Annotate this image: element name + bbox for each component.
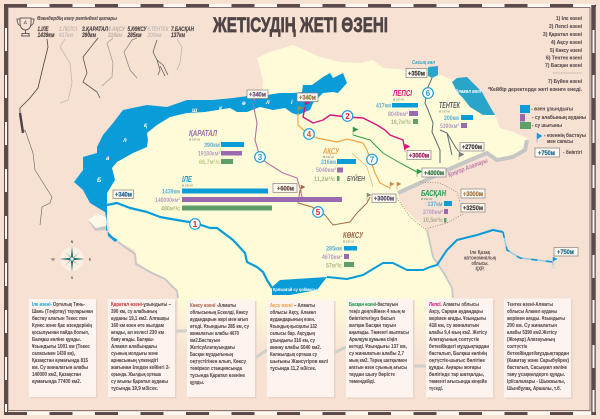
legend: - өзеннің бастауы [544, 132, 586, 139]
card: Ile river: аумағында 77400 км2. [32, 379, 81, 385]
data block: Aksu [314, 146, 356, 183]
card: Koksu river: аудандарын жері мен ағып [190, 317, 248, 323]
lake Balkhash: ө [242, 101, 246, 107]
icon: compass rose: S [71, 276, 74, 280]
data block: Karatal: 19100км² [198, 150, 220, 158]
card: Baskan river: биіктіктегіңуз басып [349, 315, 395, 322]
legend: - су шығыны [532, 123, 562, 129]
river: Karatal [253, 103, 316, 201]
ranking panel: rivers by length: 6.ТЕНТЕК [148, 27, 169, 33]
ranking panel: rivers by length: 390км [82, 33, 96, 39]
label: Xinjiang region [464, 250, 496, 272]
card: Baskan river: жатқан Басқан тауын [348, 323, 396, 329]
data block: Koksu: КӨКСУ [343, 230, 364, 240]
numbered river list [488, 16, 582, 93]
numbered river list: 6) Тентек өзені [546, 56, 582, 62]
card: Koksu river: құяды. [190, 380, 204, 386]
card: Karatal river: суының молдығы және [111, 351, 158, 357]
card: Aksu river: жинау алабы 5040 км2. [269, 344, 321, 351]
data block: Lepsi: 8040км² [388, 111, 408, 118]
card: Karatal river: ауданы 19,1 км2. Алғашқы [111, 316, 169, 322]
card: Lepsi river: 418 км, су жиналатын [429, 323, 479, 329]
data block: Aksu: ӨЗЕНІ [323, 155, 334, 159]
card: Tentek river: облысы Алакөл ауданы [507, 308, 557, 315]
icon: compass rose: E [89, 258, 92, 262]
map: land territory [88, 45, 527, 366]
card: Baskan river: аңалады. Төменгі жылғасы [349, 330, 409, 336]
card: Baskan river: ағатын өзен суының ағысы [349, 365, 407, 371]
elevation labels: +340м [115, 192, 132, 198]
data block: Ile: 1439км [162, 188, 180, 196]
card: Karatal river: тұсында 19,9 м3/сек. [111, 386, 158, 392]
card: Baskan river: Басқан өзені-бастауын [349, 301, 398, 308]
card: Karatal river: арнасының үлкендігі [111, 358, 158, 364]
river number badges [190, 88, 433, 229]
card: Koksu river [187, 300, 256, 398]
elevation labels: +340м [249, 92, 266, 98]
card: Karatal river: Қаратал өзені-ұзындығы – [111, 302, 171, 308]
data block: Tentek: 5390км² [440, 123, 459, 130]
card: Aksu river: аудандарының өзен. [270, 317, 315, 323]
card: Karatal river: баяу ағады. Балқаш- [111, 336, 154, 343]
card: Ile river: км. Су жиналатын алабы [32, 364, 88, 371]
river number badges: 2 [345, 112, 350, 121]
card: Aksu river: Ақсу өзені – Алматы [270, 303, 315, 309]
elevation labels: +3000м [409, 152, 429, 160]
card: Lepsi river: алабы 9,4 мың км2. Жетісу [429, 329, 488, 336]
river number badges: 6 [426, 89, 431, 98]
card: Ile river: Шань (Тәңіртау) тауларынан [32, 309, 93, 315]
icon: trophy [17, 18, 34, 36]
card: Lepsi river: оңтүстік-шығыс бөлігіне [429, 357, 485, 364]
ranking panel: rivers by length [20, 16, 195, 225]
data block: Baskan: 2700км² [423, 209, 443, 216]
ranking panel: rivers by length: 7.БАСҚАН [171, 27, 195, 33]
elevation labels: +2700м [462, 144, 482, 151]
card: Ile river: бастау алатын Текес пен [32, 315, 87, 322]
card: Lepsi river [426, 298, 494, 399]
label: Xinjiang region: автономиялық [464, 256, 496, 262]
title: ЖЕТІСУДІҢ ЖЕТІ ӨЗЕНІ [212, 14, 388, 37]
card: Koksu river: теміржол станциясында [190, 366, 243, 372]
river: Ile [107, 203, 553, 288]
card: Ile river: қосылуынан пайда болып, [32, 329, 89, 336]
data block: Koksu [322, 230, 364, 270]
legend: +750м [538, 150, 555, 157]
card: Tentek river: 200 км. Су жиналатын [507, 323, 557, 329]
ranking panel: rivers by length: 417км [58, 33, 73, 39]
card: Lepsi river: бөлігінде тар шатқалды, [429, 371, 484, 378]
card: Koksu river: Көксу өзені -Алматы [190, 303, 236, 309]
card: Karatal river: орында. Жылдық орташа [111, 372, 162, 378]
label: Buyen river: БҮЙЕН [347, 174, 365, 183]
river: Buyen [352, 153, 373, 187]
card: Lepsi river: Ақсу, Сарқан аудандары [429, 309, 483, 315]
card: Karatal river: жағынан Іледен кейінгі 2- [110, 364, 170, 371]
lake Balkhash [74, 73, 347, 242]
elevation labels: +3000м [374, 196, 394, 202]
data block: Ile: ӨЗЕНІ [182, 184, 193, 188]
elevation labels [113, 68, 578, 256]
river: Baskan [353, 135, 417, 172]
legend: - өзен ұзындығы [531, 106, 573, 112]
label: Xinjiang region: ҚХР. [476, 266, 485, 272]
lake Alakol [452, 77, 495, 115]
card: Karatal river: су ағыны Қаратал ауданы [111, 379, 168, 385]
data block: Aksu: 5040км² [316, 167, 336, 174]
river number badges: 7 [370, 156, 375, 164]
card: Karatal river: Алакөл алабындағы [111, 343, 157, 350]
card: Tentek river: жерімен ағады. Ұзындығы [506, 316, 565, 322]
river: Tentek [425, 78, 460, 163]
card: Baskan river: су жиналатын алабы 2,7 [349, 350, 404, 357]
river: Aksu [298, 113, 390, 188]
card: Aksu river: шығыны Жансүгіров көлі [270, 359, 328, 365]
card: Baskan river: теңіз деңгейінен 4 мың м [349, 308, 405, 315]
river number badges: 5 [316, 208, 321, 217]
river number badges: 1 [193, 220, 198, 229]
numbered river list: 1) Іле өзені [556, 16, 582, 22]
card: Baskan river: Аралқум құмына сіңіп [349, 337, 397, 343]
data block: Koksu: 57м³/с [326, 262, 342, 270]
data block: Tentek [439, 100, 473, 130]
data block: Koksu: 4670км² [322, 254, 342, 261]
data block: Ile [155, 174, 342, 212]
data block: Baskan: ӨЗЕНІ [421, 197, 432, 201]
elevation labels: +600м [277, 186, 294, 192]
lake Balkhash: Б [97, 178, 102, 184]
card: Tentek river: алабы 5390 км2.Жетісу [507, 329, 558, 336]
card: Tentek river: Тентек өзені-Алматы [507, 302, 553, 308]
card: Ile river: Күнес және Қас өзендерінің [32, 323, 92, 329]
card: Aksu river: ұзындығы 316 км, су [270, 338, 316, 344]
ranking panel: rivers by length: Өзендердің кену ретіндегі қатары [37, 16, 117, 22]
card: Ile river: Қазақстан аумағында 815 [32, 358, 88, 364]
card: Ile river: Балқаш көліне құяды. [32, 337, 81, 343]
card: Baskan river: төмендейді. [349, 378, 375, 385]
lake Balkhash: қ [144, 123, 148, 129]
card: Lepsi river: Алатауының солтүстік [429, 337, 479, 343]
card: Ile river: 140000 км2, Қазақстан [32, 372, 81, 378]
data block: Aksu: АҚСУ [322, 146, 340, 156]
card: Tentek river: басталып, Сасықкөл көліне [507, 364, 567, 371]
ranking panel: rivers by length: 2.ЛЕПСІ [58, 27, 77, 33]
card: Lepsi river: жерімен ағады. Ұзындығы [428, 316, 486, 322]
card: Koksu river: жиналатын алабы 4670 [189, 330, 239, 337]
data block: Baskan: 137км [428, 201, 443, 208]
card: Ile river [29, 299, 98, 398]
ranking panel: rivers by length: 200км [147, 33, 162, 39]
card: Tentek river: Шынбұлақ, Аршалы, т.б. [507, 385, 561, 392]
label: Xinjiang region: облысы. [472, 260, 489, 267]
card: Aksu river: салысы бар. Ақсудың [270, 330, 315, 337]
data block: Lepsi: 18,7м³/с [391, 119, 411, 126]
numbered river list: 3) Қаратал өзені [543, 32, 582, 38]
Baskan dotted boundary [397, 182, 463, 229]
card: Aksu river: облысы Ақсу, Алакөл [270, 309, 316, 316]
card: Lepsi river: түседі. [429, 386, 443, 392]
lake Balkhash: а [106, 156, 110, 162]
card: Aksu river: тұсында 11,2 м3/сек. [270, 366, 316, 372]
icon: compass rose: N [71, 240, 74, 244]
card: Tentek river: беткейіндегі/мұздықтардан [507, 350, 569, 357]
card: Tentek river [504, 298, 572, 399]
lake Sasyk [412, 60, 438, 78]
data block: Lepsi: 417км [376, 102, 391, 110]
card: Koksu river: Басқан мұздығының [190, 352, 233, 358]
card: Baskan river [346, 298, 414, 399]
card: Karatal river: 390 км, су алабының [111, 308, 157, 315]
numbered river list: *Кейбір деректерде жеті өзенге енеді. [488, 86, 582, 93]
data block: Koksu: ӨЗЕНІ [343, 240, 354, 244]
card: Aksu river: Ұзындық-қысқалы 132 [270, 324, 317, 330]
data block: Baskan: 10,5м³/с [423, 217, 443, 224]
elevation labels: +4000м [424, 170, 444, 177]
card: Tentek river: Ірі/салалары - Шыжжылы, [507, 379, 565, 385]
lake Balkhash: л [122, 138, 127, 144]
lake Balkhash: ш [192, 108, 198, 114]
legend [520, 105, 586, 157]
card: Tentek river: (Жоңғар) Алатауының [507, 337, 555, 343]
data block: Baskan [421, 188, 452, 224]
ranking panel: rivers by length: 285км [127, 33, 142, 39]
data block: Lepsi: ӨЗЕНІ [393, 98, 404, 102]
card: Lepsi river: беткейіндегі мұздықтардан [429, 343, 489, 350]
card: Baskan river: таудан шығу бөрісте [349, 371, 395, 378]
elevation labels: +340м [299, 94, 316, 102]
card: Ile river: саласымен 1439 км), [32, 351, 75, 357]
card: Baskan river: мың км2. Терең шатқалмен [349, 358, 407, 364]
data block: Karatal: ӨЗЕНІ [189, 138, 200, 142]
card: Koksu river: км2.Бастауын [190, 338, 220, 344]
card: Aksu river [267, 300, 336, 398]
card: Lepsi river: төменгі ағысында кеңейе [429, 378, 487, 385]
data block: Ile: 480м³/с [161, 206, 180, 212]
lake Sasyk: Сасық көл [412, 60, 436, 66]
lake Balkhash: л [265, 100, 270, 106]
card: Tentek river: (Кавитау және Сарыбүйрек) [507, 357, 569, 364]
ranking panel: rivers by length: 3.ҚАРАТАЛ [82, 27, 109, 33]
card: Tentek river: солтүстік [507, 344, 527, 350]
river number badges: 4 [307, 130, 312, 139]
data block: Tentek: ӨЗЕНІ [439, 110, 450, 114]
data block: Karatal [189, 128, 244, 166]
lake Balkhash: і [291, 100, 293, 106]
data block: Aksu: 11,2м³/с [314, 176, 335, 183]
legend: мен сағасы [547, 139, 573, 145]
numbered river list: 4) Ақсу өзені [551, 40, 582, 46]
river number badges: 3 [258, 153, 263, 162]
ranking panel: rivers by length: 5.КӨКСУ [128, 27, 147, 33]
data block: Karatal: ҚАРАТАЛ [189, 128, 217, 138]
ranking panel: rivers by length: 316км [108, 33, 122, 39]
data block: Tentek: ТЕНТЕК [439, 100, 460, 110]
ranking panel: rivers by length: 137км [171, 33, 185, 39]
Kapshagai reservoir: Қапшағай су қоймасы [273, 286, 317, 292]
card: Aksu river: Көлжылдық орташа су [270, 352, 318, 358]
card: Karatal river: ағады, ал келесі 230 км [111, 330, 164, 336]
card: Ile river: Ұзындығы 1001 км (Текес [32, 344, 90, 350]
legend: - су алабының ауданы [532, 114, 586, 121]
card: Ile river: Іле өзені- Орталық Тянь- [32, 302, 85, 308]
card: Karatal river: 160 км өзен өте жылдам [111, 323, 164, 329]
legend: - биіктігі [563, 149, 582, 156]
card: Koksu river: облысының Ескелді, Көксу [190, 309, 249, 316]
card: Koksu river: өтеді. Ұзындығы 285 км, су [190, 324, 250, 330]
ranking panel: rivers by length: 4.АҚСУ [107, 27, 126, 33]
card: Lepsi river: Лепсі. Алматы облысы [429, 301, 479, 308]
data block: Lepsi [376, 88, 418, 126]
lake Alakol: Алакөл көлі [454, 89, 482, 95]
numbered river list: 2) Лепсі өзені [549, 24, 582, 30]
label: Zhongar Alatau range: Қоңғар Алатауы [447, 157, 489, 179]
data block: Lepsi: ЛЕПСІ [392, 88, 412, 98]
river: Lepsi [303, 107, 405, 150]
elevation labels: +350м [408, 70, 425, 78]
elevation labels: +3000м [463, 191, 483, 198]
elevation labels: +750м [557, 249, 574, 256]
card: Lepsi river: басталып, Балқаш көлінің [429, 350, 487, 357]
data block: Ile: 140000км² [155, 197, 180, 204]
data block: Tentek: 200км [444, 115, 459, 122]
river: Koksu [298, 190, 370, 225]
card: Koksu river: ЖетісуАлатауындағы [189, 345, 235, 351]
Kapshagai reservoir [272, 277, 327, 295]
data block: Karatal: 390км [204, 142, 220, 149]
data block: Karatal: 66,7м³/с [199, 159, 220, 166]
card: Lepsi river: құяды. Аңғары жоғары [429, 365, 481, 371]
ranking panel: rivers by length: 1439км [38, 33, 55, 39]
card: Tentek river: таяу ұсақкөлдерге құяды. [507, 372, 565, 378]
flags [253, 97, 557, 269]
numbered river list: 5) Көксу өзені [550, 48, 582, 54]
label: Xinjiang region: Іле Қазақ [470, 250, 490, 256]
card: Baskan river: кетеді. Ұзындығы 137 км, [349, 344, 407, 350]
card: Karatal river [108, 299, 176, 398]
elevation labels: +3250м [463, 205, 483, 212]
card: Koksu river: оңтүстігінен алып, Көксу [190, 359, 247, 365]
icon: compass rose [51, 240, 92, 280]
data block: Baskan: БАСҚАН [421, 188, 447, 198]
ranking panel: rivers by length: 1.ІЛЕ [38, 27, 49, 33]
lake Balkhash: к [219, 106, 223, 112]
card: Koksu river: тұсында Қаратал өзеніне [190, 373, 245, 379]
data block: Aksu: 316км [321, 159, 336, 166]
icon: compass rose: W [51, 258, 55, 262]
numbered river list: 7) Басқан өзені [545, 63, 582, 69]
data block: Koksu: 285км [326, 246, 342, 252]
data block: Ile: ІЛЕ [182, 174, 192, 184]
numbered river list: 7) Бүйен өзені [548, 78, 582, 85]
